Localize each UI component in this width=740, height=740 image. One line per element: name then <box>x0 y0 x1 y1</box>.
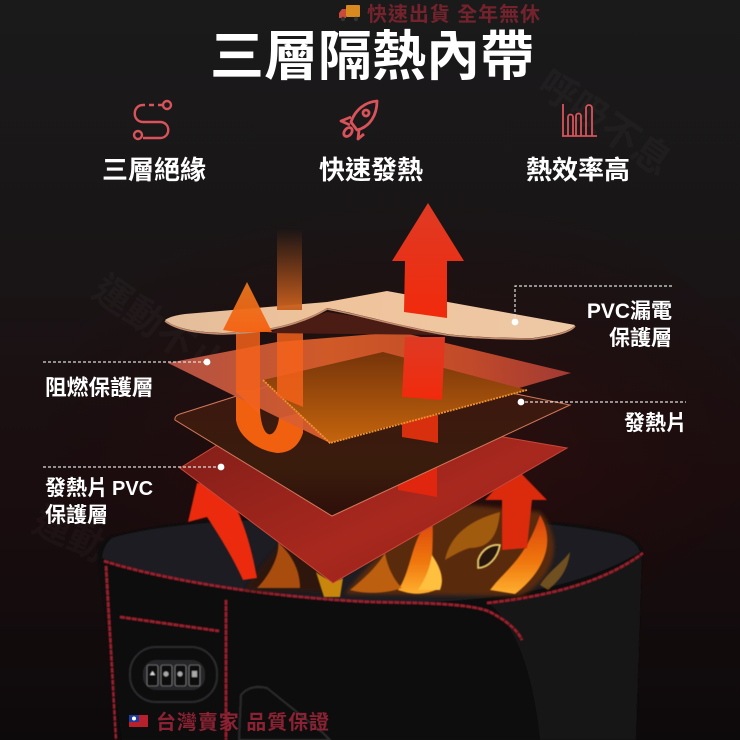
feature: fast heating: 快速發熱 <box>319 155 423 185</box>
control panel <box>130 647 217 702</box>
feature: high heat efficiency: 熱效率高 <box>526 155 630 185</box>
label: heating sheet PVC protection: PVC <box>112 478 153 500</box>
belt <box>97 516 643 740</box>
shop tagline: Taiwan seller: 台灣賣家 品質保證 <box>156 710 329 734</box>
layer: mesh flame retardant sheet <box>168 332 571 443</box>
feature: fast heating <box>319 101 423 185</box>
label: PVC leakage protection: 保護層 <box>609 327 672 350</box>
arrow: big red segment middle <box>402 415 438 443</box>
label: flame retardant protection: 阻燃保護層 <box>45 375 153 400</box>
watermark: 運動不止 <box>26 500 182 602</box>
watermark: 呼吸不息 <box>307 380 409 465</box>
label: PVC leakage protection: PVC漏電 <box>587 300 672 323</box>
stitching <box>104 553 643 740</box>
arrow: orange top head <box>223 282 272 332</box>
label: flame retardant protection <box>43 359 210 400</box>
label: heating sheet <box>518 399 687 435</box>
icon: rocket <box>341 101 377 139</box>
arrow: fading column <box>277 228 302 310</box>
arrow: big red segment upper <box>402 337 445 400</box>
label: heating sheet PVC protection <box>43 464 224 527</box>
layer: red heating PVC protection sheet <box>180 400 567 583</box>
watermark: 呼吸不息 <box>530 63 678 185</box>
icon: route S <box>134 101 171 139</box>
feature: high heat efficiency <box>526 104 630 185</box>
label: heating sheet PVC protection: 保護層 <box>45 504 108 527</box>
watermark <box>26 63 678 602</box>
layer: dark heating sheet <box>175 360 570 516</box>
flames: bright tongues <box>257 512 570 597</box>
arrow: lower right red <box>485 467 547 550</box>
label: heating sheet: 發熱片 <box>624 412 687 435</box>
arrow: lower left red <box>188 483 257 580</box>
flames: dim glow <box>345 505 554 596</box>
icon: Taiwan flag <box>129 715 148 727</box>
feature: three-layer insulation: 三層絕緣 <box>102 155 206 185</box>
label: PVC leakage protection <box>512 286 672 350</box>
shop tagline: fast shipping: 快速出貨 全年無休 <box>367 2 540 26</box>
watermark: 運動不止 <box>85 268 233 390</box>
arrow: big red top <box>392 203 464 318</box>
arrow: orange U-turn lower part <box>236 390 303 453</box>
icon: bar chart <box>562 104 597 136</box>
arrow: big red segment low <box>398 460 437 497</box>
layer: beige PVC leakage protection <box>165 291 575 339</box>
arrow: orange U-turn upper arms <box>236 332 303 415</box>
flames <box>245 505 570 597</box>
feature: three-layer insulation <box>102 101 206 185</box>
icon: delivery truck <box>339 5 360 21</box>
title: 三層隔熱內帶 <box>210 27 534 87</box>
label: heating sheet PVC protection: 發熱片 <box>45 477 108 500</box>
